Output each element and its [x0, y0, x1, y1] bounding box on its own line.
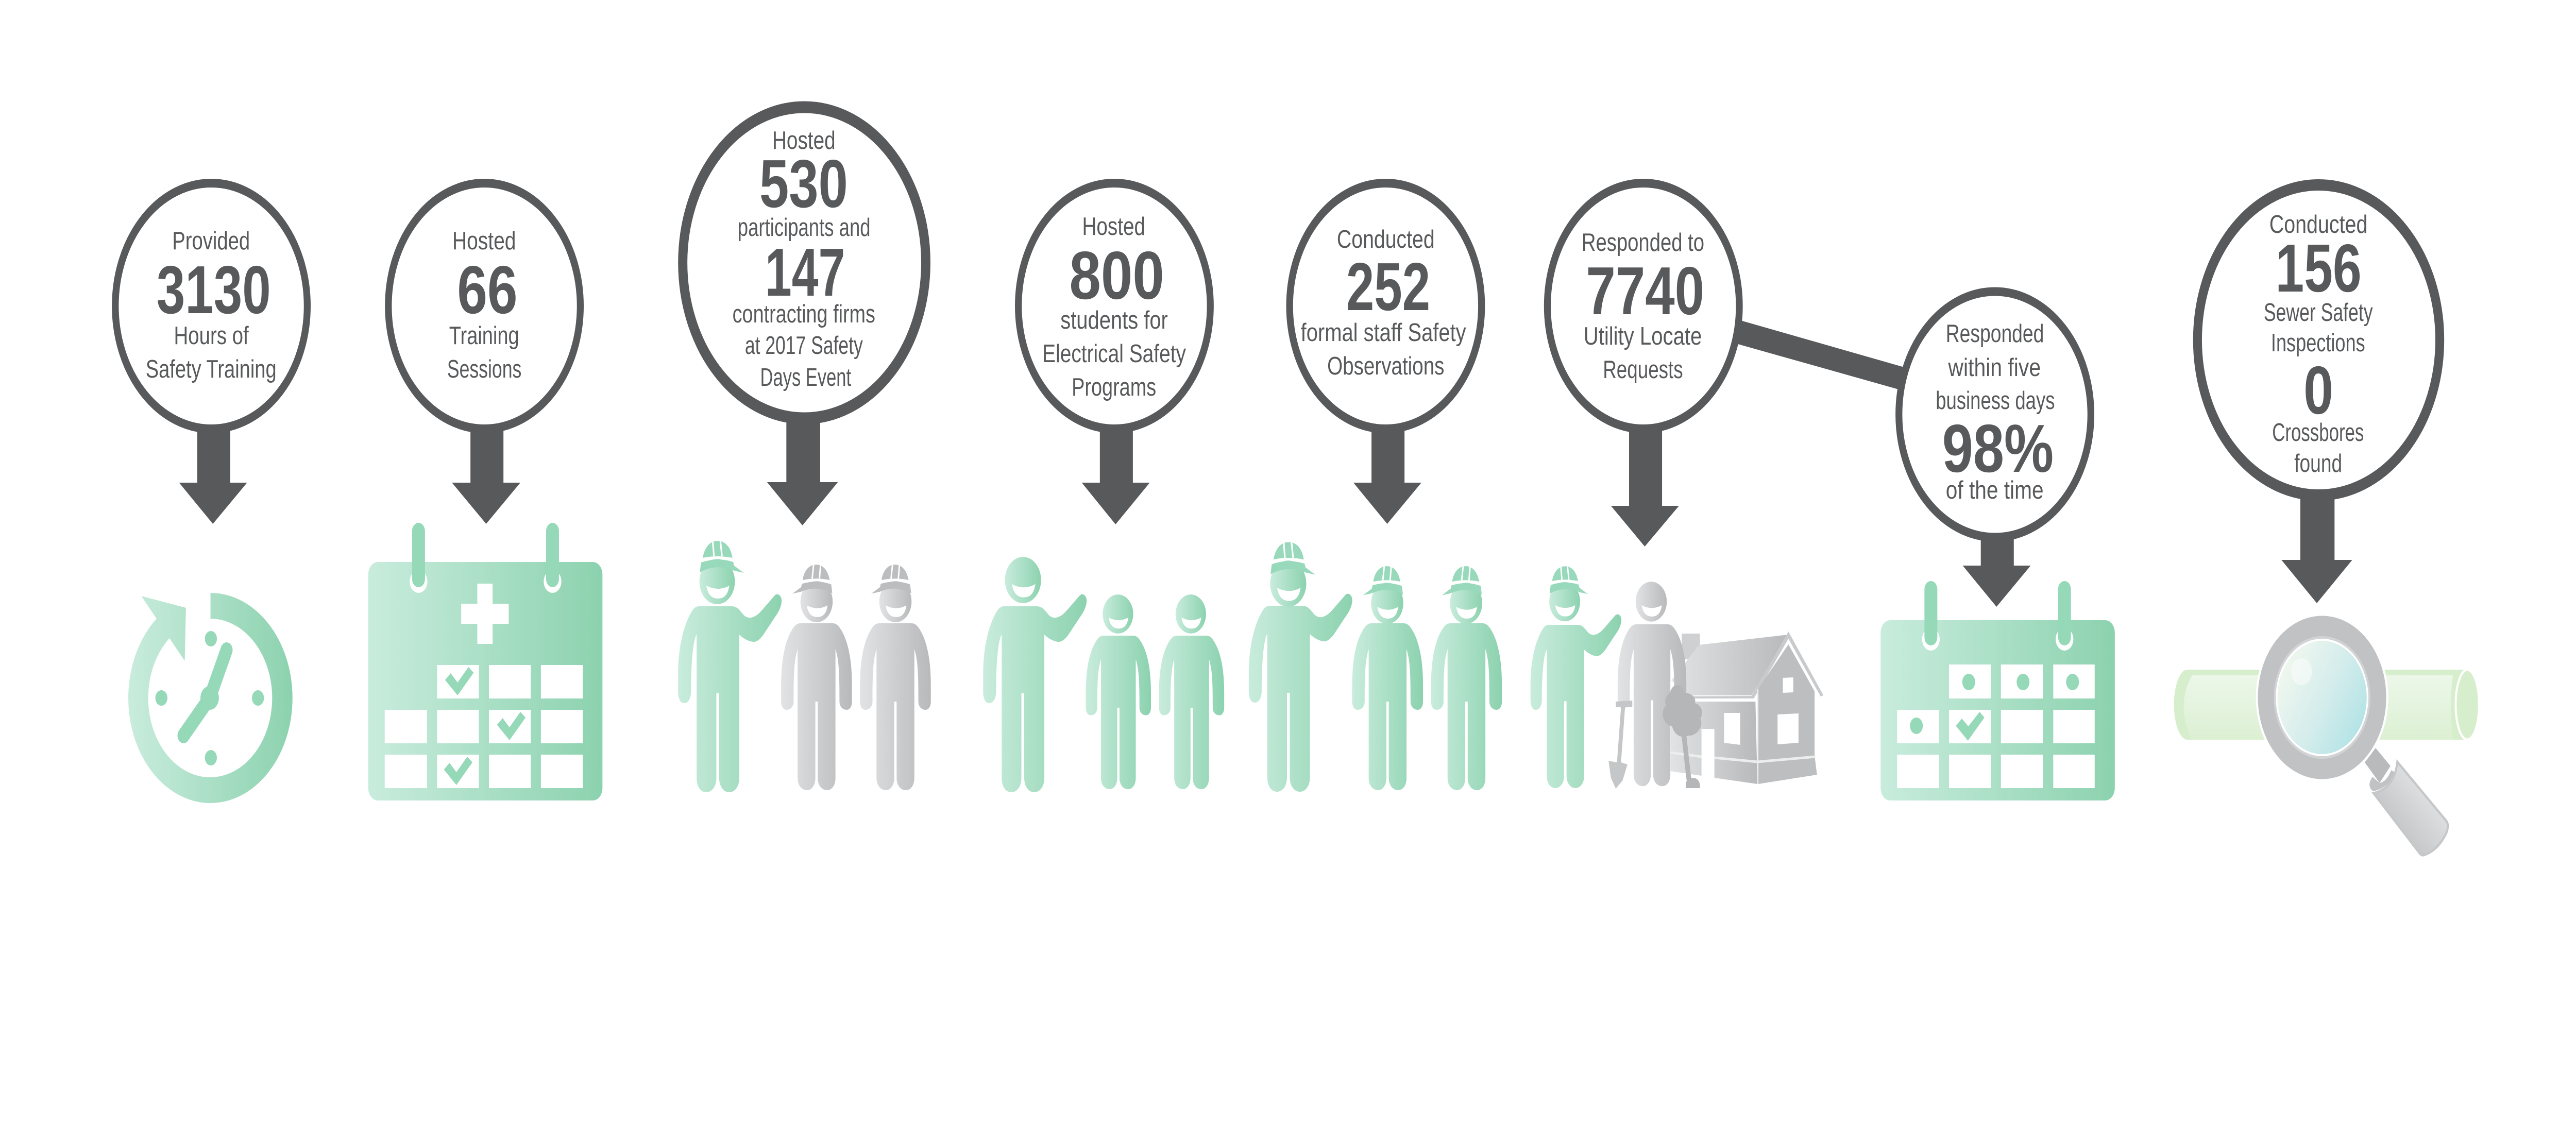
callout text: Responded [1946, 320, 2044, 348]
callout text: Inspections [2271, 329, 2365, 357]
callout text: 530 [759, 146, 848, 222]
callout circle [1899, 292, 2091, 537]
icon: worker and gray man with shovel and bush [1531, 566, 1702, 789]
arrow [179, 425, 247, 524]
callout text [1582, 229, 1704, 384]
callout text: Sessions [447, 355, 521, 383]
callout text: Sewer Safety [2264, 299, 2373, 327]
arrow [1963, 531, 2031, 607]
callout text: Provided [172, 227, 250, 255]
callout text [1301, 226, 1466, 380]
callout circle [1290, 183, 1482, 429]
callout text: Hosted [772, 127, 836, 155]
callout text: Crossbores [2272, 419, 2364, 447]
callout text: Training [449, 322, 519, 350]
icon: three workers [1249, 542, 1502, 792]
arrow [1611, 425, 1679, 547]
callout text: 0 [2303, 353, 2333, 429]
arrow [1082, 425, 1150, 524]
callout text: contracting firms [733, 300, 875, 328]
arrow [2281, 495, 2352, 603]
callout text: Conducted [1337, 226, 1435, 253]
callout text: Utility Locate [1584, 322, 1702, 350]
callout text: 147 [765, 235, 845, 311]
callout text: Days Event [760, 364, 851, 391]
callout text: Conducted [2269, 211, 2367, 238]
icon: pipe [2174, 670, 2479, 740]
icon: clock [128, 593, 293, 803]
callout text [447, 227, 521, 383]
connector between locate callouts [1736, 320, 1904, 389]
arrow [1353, 425, 1421, 524]
icon: calendar with dots [1880, 581, 2115, 800]
callout text [2264, 211, 2373, 478]
callout text: Electrical Safety [1042, 340, 1186, 368]
callout text: 800 [1069, 238, 1164, 314]
icon: worker with two gray workers [678, 541, 931, 792]
callout circle [2197, 185, 2440, 495]
callout text: participants and [738, 214, 871, 242]
icon: calendar with cross [368, 523, 602, 800]
callout circle [1019, 183, 1210, 429]
callout circle [683, 107, 926, 418]
icon: house [1670, 632, 1823, 784]
callout text: Responded to [1582, 229, 1704, 257]
panel: staff safety observations [1249, 183, 1502, 792]
icon: instructor with two students [983, 557, 1224, 792]
callout text [1042, 213, 1186, 401]
callout text: students for [1060, 306, 1168, 334]
arrow [767, 417, 838, 525]
callout text: 98% [1942, 411, 2054, 487]
callout text: Programs [1072, 373, 1156, 401]
panel: training sessions [368, 183, 602, 800]
callout text: Observations [1327, 352, 1444, 380]
callout text: Requests [1603, 356, 1683, 384]
callout text: business days [1936, 387, 2055, 415]
panel: utility locate requests [1531, 183, 1823, 789]
callout text: formal staff Safety [1301, 319, 1466, 347]
callout text: found [2294, 450, 2342, 478]
panel: safety training hours [115, 183, 307, 803]
icon: magnifying glass [2257, 615, 2448, 855]
callout text: within five [1948, 354, 2041, 382]
panel: sewer safety inspections [2174, 185, 2479, 855]
callout text: 7740 [1586, 253, 1704, 329]
callout text: 66 [457, 252, 518, 328]
callout text: at 2017 Safety [745, 332, 863, 360]
callout circle [115, 183, 307, 429]
panel: safety days event [678, 107, 931, 792]
panel: electrical safety programs [983, 183, 1224, 792]
callout text [733, 127, 875, 391]
arrow [452, 425, 520, 524]
callout text: 252 [1346, 249, 1430, 325]
callout circle [1547, 183, 1739, 429]
callout text: of the time [1946, 476, 2044, 504]
callout text: Hosted [1082, 213, 1145, 241]
callout text: Safety Training [146, 355, 277, 383]
callout text [1936, 320, 2055, 504]
callout circle [388, 183, 580, 429]
callout text: 156 [2275, 231, 2362, 306]
callout text: 3130 [157, 252, 271, 328]
panel: five day response [1880, 292, 2115, 800]
callout text: Hosted [452, 227, 516, 255]
callout text [146, 227, 277, 383]
callout text: Hours of [174, 322, 249, 350]
